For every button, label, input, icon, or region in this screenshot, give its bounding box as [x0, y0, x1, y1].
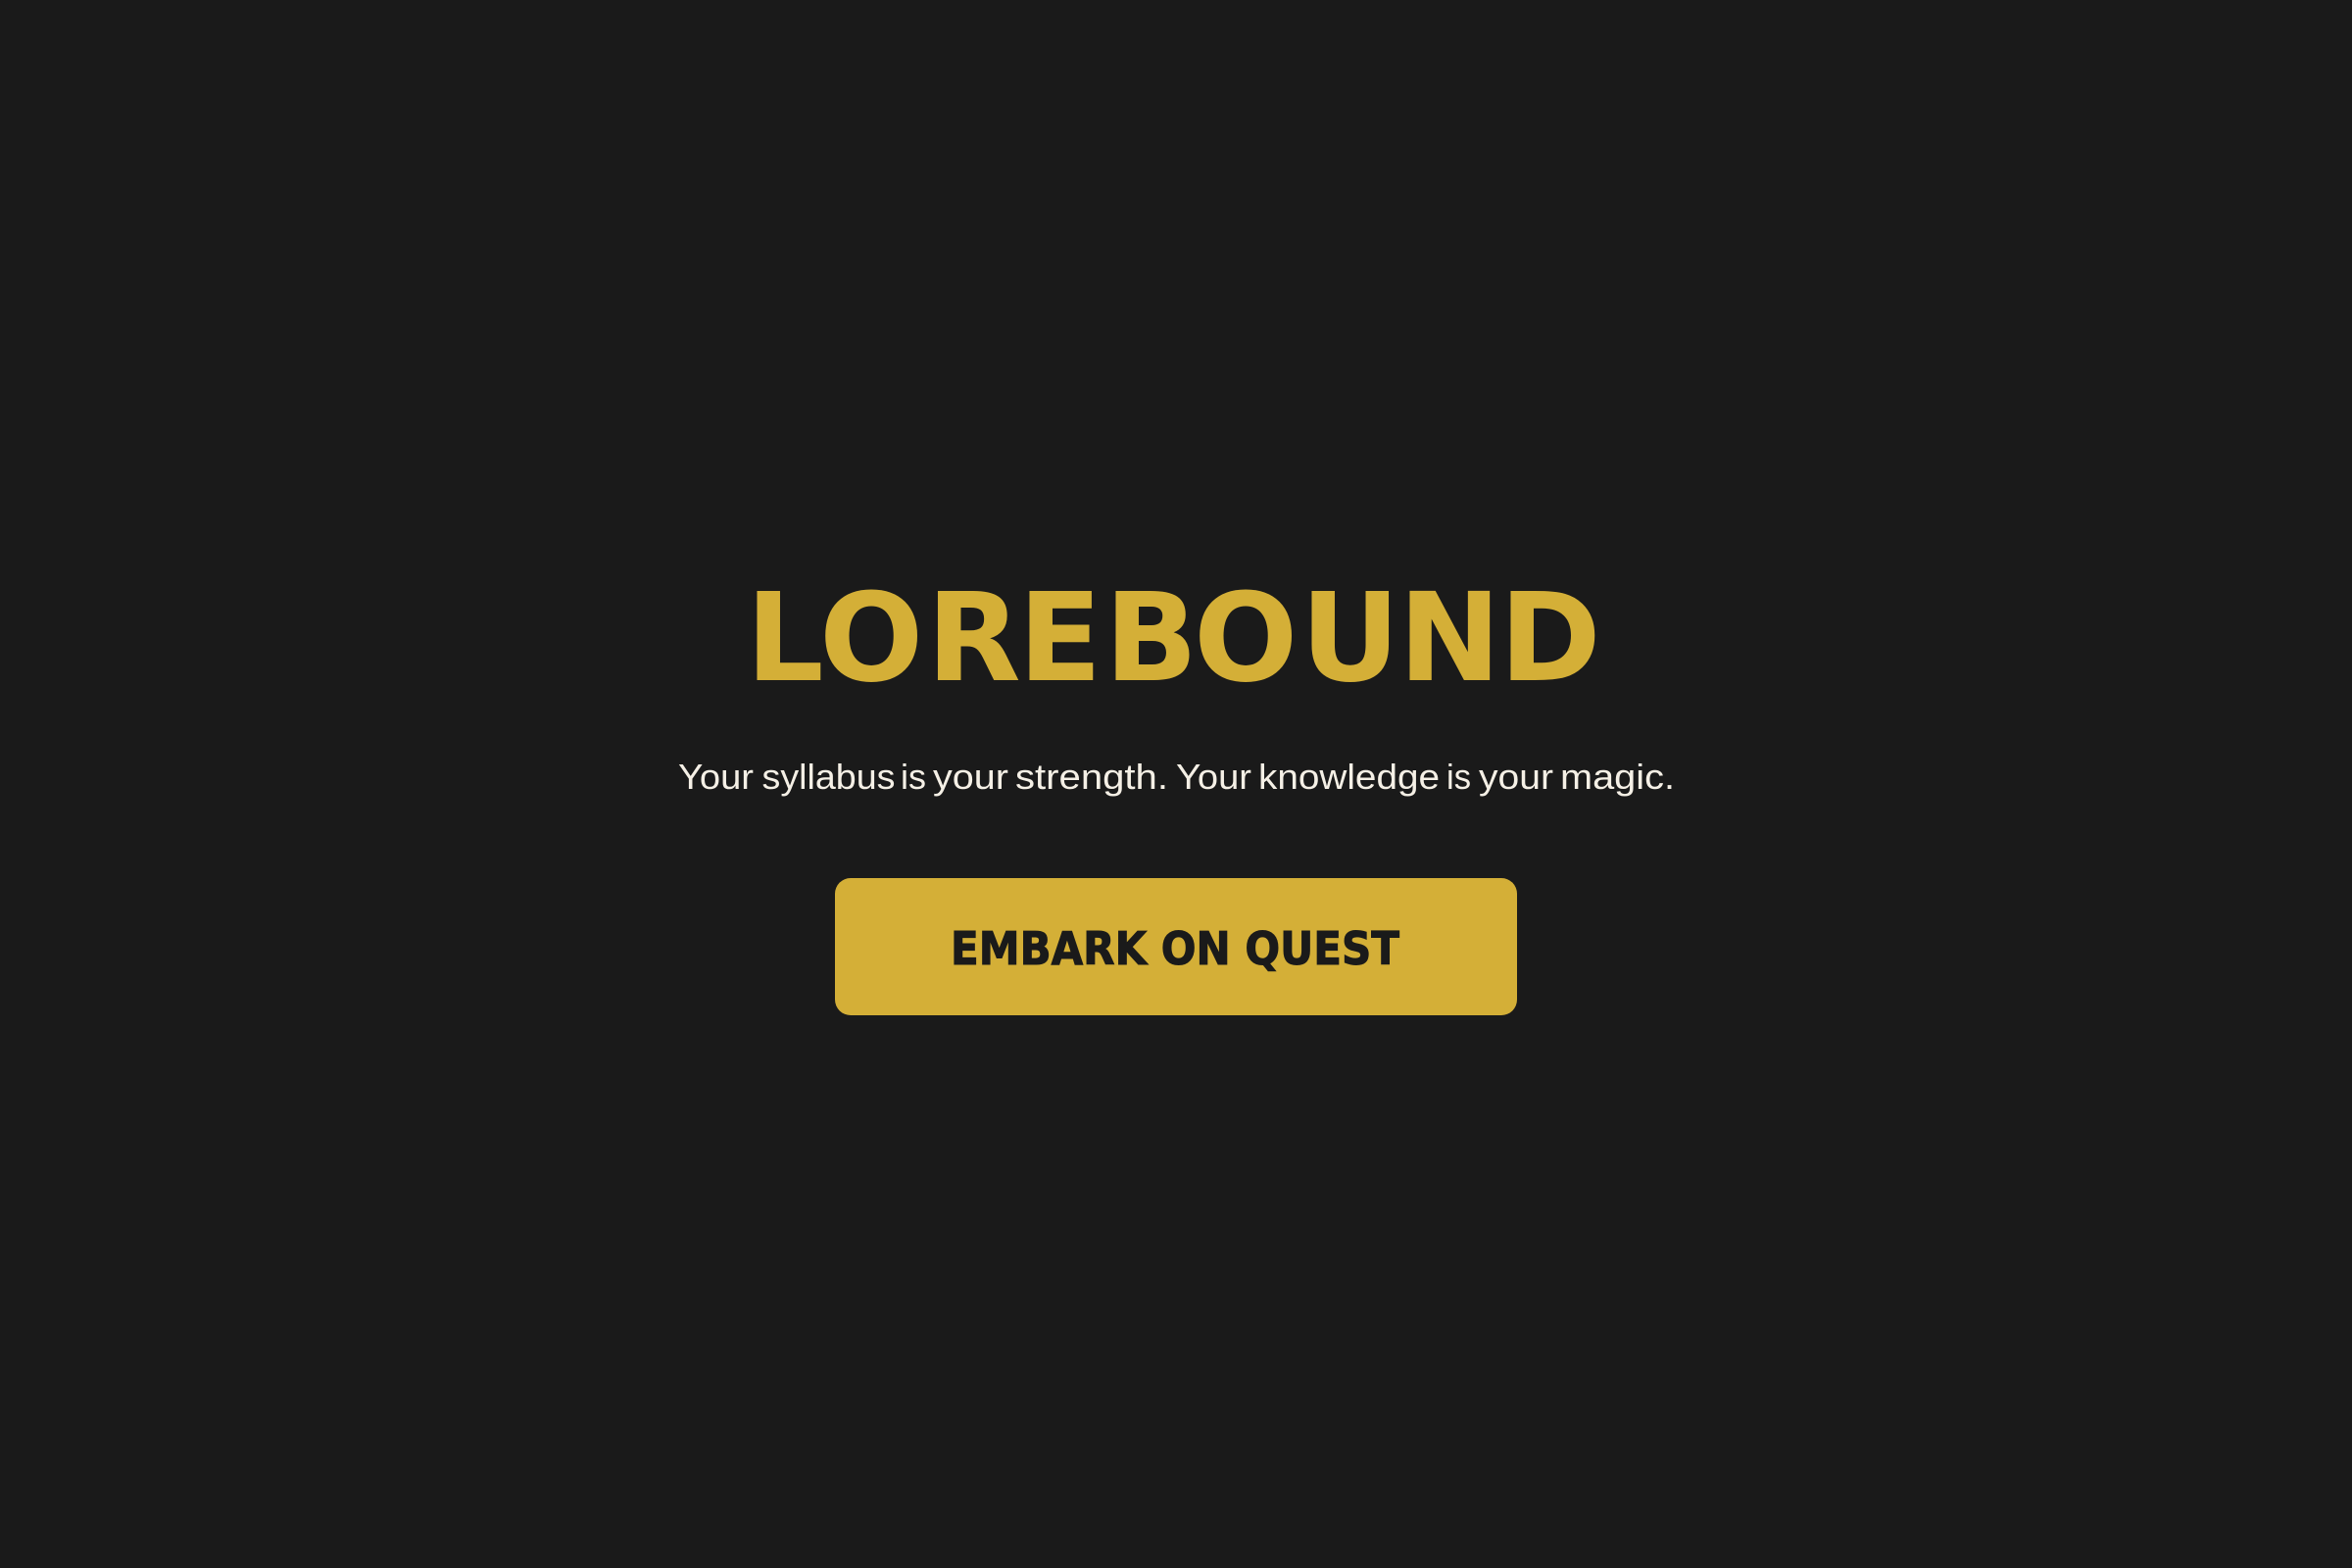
tagline: is [901, 757, 926, 797]
button: embark on quest [835, 878, 1517, 1015]
tagline: strength. [1015, 757, 1168, 797]
tagline: your [933, 757, 1008, 797]
tagline: your [1479, 757, 1553, 797]
tagline: is [1446, 757, 1471, 797]
tagline: Your [1176, 757, 1251, 797]
tagline: Your [678, 757, 754, 797]
tagline: magic. [1560, 757, 1675, 797]
title: LOREBOUND [746, 567, 1601, 710]
button label: EMBARK ON QUEST [951, 922, 1399, 975]
tagline: syllabus [762, 757, 896, 797]
tagline: knowledge [1258, 757, 1440, 797]
